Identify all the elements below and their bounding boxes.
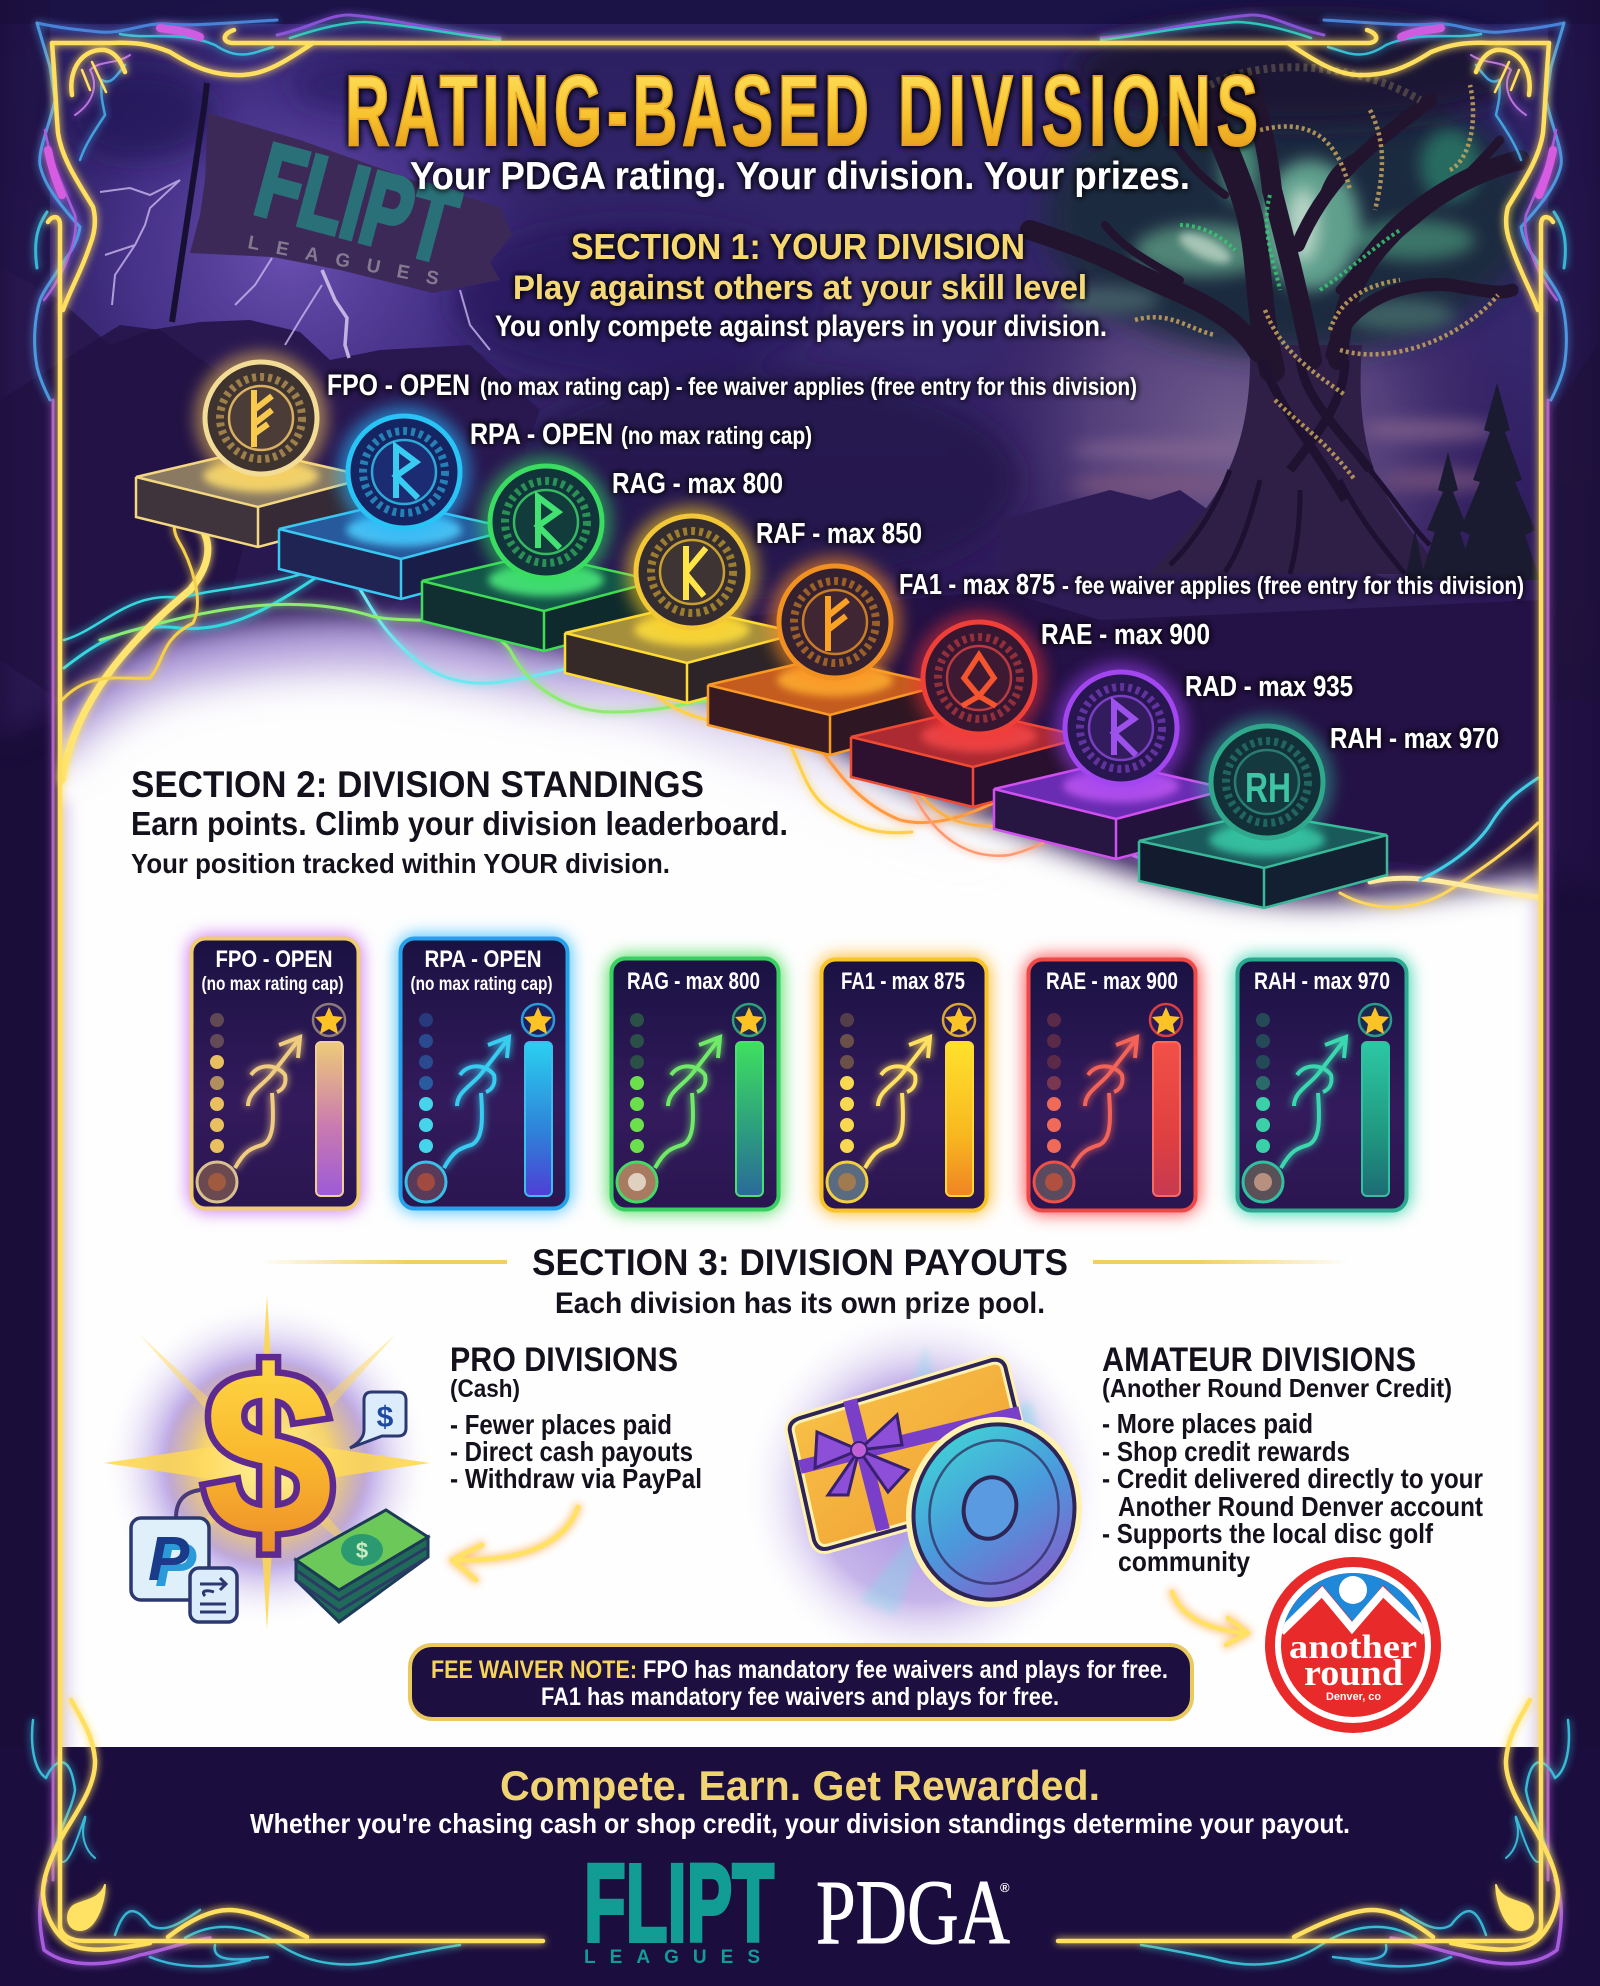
card: RPA standings xyxy=(396,934,572,1213)
section 1 heading xyxy=(495,226,1107,343)
amateur divisions text: AMATEUR DIVISIONS xyxy=(1102,1341,1416,1379)
bow xyxy=(815,1415,908,1495)
label: RAE: RAE - max 900 xyxy=(1041,619,1210,651)
label: FPO: (no max rating cap) - fee waiver applies (free entry for this division) xyxy=(480,373,1137,401)
step: RAD platform and coin xyxy=(994,662,1229,859)
mountains xyxy=(0,267,1540,880)
card: RPA standings: (no max rating cap) xyxy=(410,974,552,995)
frame: outer neon strands, right side xyxy=(1101,15,1569,1966)
amateur divisions text: - More places paid xyxy=(1102,1408,1313,1439)
pro divisions text xyxy=(450,1341,702,1494)
disc xyxy=(890,1402,1098,1622)
arrow: amateur text to logo xyxy=(1172,1592,1248,1645)
logo: Another Round Denver: round xyxy=(1304,1653,1403,1694)
section 1 heading: You only compete against players in your division. xyxy=(495,310,1107,343)
section 1 heading: SECTION 1: YOUR DIVISION xyxy=(571,226,1025,267)
card: RAG standings: RAG - max 800 xyxy=(627,968,760,995)
pro divisions text: - Direct cash payouts xyxy=(450,1436,693,1467)
callout: fee waiver note: FPO has mandatory fee waivers and plays for free. xyxy=(643,1656,1168,1684)
icon: dollar speech bubble xyxy=(350,1392,406,1448)
step: RAH platform and coin: RH xyxy=(1245,764,1291,811)
flag pole xyxy=(172,83,207,322)
division ladder xyxy=(136,352,1387,908)
logo: PDGA: ® xyxy=(1000,1880,1010,1895)
logo: FLIPT Leagues xyxy=(584,1842,774,1968)
callout: fee waiver note xyxy=(410,1645,1192,1719)
label: FPO xyxy=(327,369,1137,402)
card: RAH standings: RAH - max 970 xyxy=(1254,968,1390,995)
label: FPO: FPO - OPEN xyxy=(327,369,470,402)
title xyxy=(345,55,1258,167)
section 2 heading: Earn points. Climb your division leaderboard. xyxy=(131,805,788,842)
step: RAG platform and coin xyxy=(422,456,657,651)
amateur divisions text: - Shop credit rewards xyxy=(1102,1436,1350,1467)
section 2 heading xyxy=(131,764,788,879)
amateur divisions text: (Another Round Denver Credit) xyxy=(1102,1373,1452,1403)
icon: glowing dollar, PayPal and cash xyxy=(102,1295,432,1630)
sun rays xyxy=(104,1295,430,1630)
dark clouds xyxy=(65,57,1020,590)
pro divisions text: - Fewer places paid xyxy=(450,1409,672,1440)
icon: PayPal card xyxy=(131,1490,209,1600)
step: RAH platform and coin xyxy=(1139,716,1387,908)
label: RAG: RAG - max 800 xyxy=(612,468,783,500)
pro divisions text: (Cash) xyxy=(450,1375,520,1403)
card: RAH standings xyxy=(1233,955,1411,1215)
card: FPO standings xyxy=(187,934,363,1213)
scene: storm sky, flag and world tree xyxy=(0,0,1600,960)
step: FA1 platform and coin xyxy=(708,556,943,755)
section 3 heading: Each division has its own prize pool. xyxy=(555,1287,1045,1320)
logo: FLIPT Leagues: LEAGUES xyxy=(584,1947,760,1968)
label: FA1 xyxy=(899,569,1524,601)
label: RPA xyxy=(470,418,812,451)
pine trees xyxy=(1405,383,1540,580)
logo: PDGA: PDGA xyxy=(816,1861,1010,1963)
arrow: pro text to cash xyxy=(452,1507,578,1580)
card: RAG standings xyxy=(607,954,783,1214)
panel: white content area xyxy=(62,596,1539,1747)
title: DIVISIONS xyxy=(898,55,1258,167)
icon: gift card and disc xyxy=(740,1305,1110,1675)
lightning xyxy=(100,180,490,358)
amateur divisions text: community xyxy=(1118,1546,1250,1577)
card: RAE standings xyxy=(1024,955,1200,1215)
card: RAE standings: RAE - max 900 xyxy=(1046,968,1178,995)
card: FA1 standings: FA1 - max 875 xyxy=(841,968,965,995)
card: FPO standings: (no max rating cap) xyxy=(202,974,344,995)
flag: FLIPT Leagues xyxy=(190,113,512,293)
frame: outer neon strands, left side xyxy=(32,15,500,1966)
section 3 heading xyxy=(532,1242,1068,1320)
amateur divisions text: - Supports the local disc golf xyxy=(1102,1518,1434,1549)
amateur divisions text xyxy=(1102,1341,1483,1577)
icon: cash stack: $ xyxy=(356,1538,368,1563)
subtitle: Your PDGA rating. Your division. Your prizes. xyxy=(410,155,1190,198)
pro divisions text: - Withdraw via PayPal xyxy=(450,1463,702,1494)
pro divisions text: PRO DIVISIONS xyxy=(450,1341,678,1379)
step: RPA platform and coin xyxy=(279,406,514,599)
amateur divisions text: - Credit delivered directly to your xyxy=(1102,1463,1483,1494)
frame: corner flames xyxy=(68,1885,1533,1930)
amateur divisions text: Another Round Denver account xyxy=(1118,1491,1483,1522)
icon: PayPal card: P xyxy=(148,1525,190,1594)
flag: FLIPT Leagues: LEAGUES xyxy=(246,232,440,290)
label: RPA: RPA - OPEN xyxy=(470,418,613,451)
section 2 heading: Your position tracked within YOUR division. xyxy=(131,848,670,879)
footer slogan: Compete. Earn. Get Rewarded. xyxy=(500,1762,1100,1809)
label: FA1: FA1 - max 875 xyxy=(899,569,1055,601)
energy wires behind platforms xyxy=(62,508,1538,907)
division labels xyxy=(327,369,1524,755)
title: RATING-BASED xyxy=(345,55,869,167)
icon: transfer document xyxy=(190,1568,237,1622)
step: FPO platform and coin xyxy=(136,352,371,547)
label: RAD: RAD - max 935 xyxy=(1185,671,1353,703)
label: RAF: RAF - max 850 xyxy=(756,518,922,550)
world tree xyxy=(1030,15,1535,574)
icon: cash stack xyxy=(296,1510,428,1622)
section 3 heading: SECTION 3: DIVISION PAYOUTS xyxy=(532,1242,1068,1283)
icon: PayPal card: P xyxy=(155,1531,197,1600)
section 3 divider lines xyxy=(260,1260,1350,1264)
step: RAE platform and coin xyxy=(851,612,1086,807)
icon: dollar sign: $ xyxy=(203,1322,333,1584)
callout: fee waiver note: FA1 has mandatory fee waivers and plays for free. xyxy=(541,1683,1059,1711)
callout: fee waiver note: FEE WAIVER NOTE: xyxy=(431,1656,637,1684)
logo: Another Round Denver: another xyxy=(1289,1629,1417,1666)
card: RPA standings: RPA - OPEN xyxy=(424,946,542,973)
label: RPA: (no max rating cap) xyxy=(621,422,812,450)
flag: FLIPT Leagues: FLIPT xyxy=(245,122,468,286)
footer text: Whether you're chasing cash or shop credit, your division standings determine your payout. xyxy=(250,1808,1350,1839)
step: RAF platform and coin xyxy=(565,506,800,703)
card: FA1 standings xyxy=(817,955,991,1215)
icon: dollar speech bubble: $ xyxy=(377,1401,394,1434)
logo: FLIPT Leagues: FLIPT xyxy=(584,1842,774,1965)
section 1 heading: Play against others at your skill level xyxy=(513,269,1087,307)
logo: Another Round Denver: Denver, co xyxy=(1326,1691,1381,1703)
card: FPO standings: FPO - OPEN xyxy=(216,946,332,973)
section 2 heading: SECTION 2: DIVISION STANDINGS xyxy=(131,764,704,805)
gift card xyxy=(790,1360,1035,1549)
label: RAH: RAH - max 970 xyxy=(1330,723,1499,755)
footer band xyxy=(0,1747,1600,1986)
dusk cloud bands xyxy=(1070,420,1500,497)
logo: Another Round Denver xyxy=(1265,1557,1441,1733)
